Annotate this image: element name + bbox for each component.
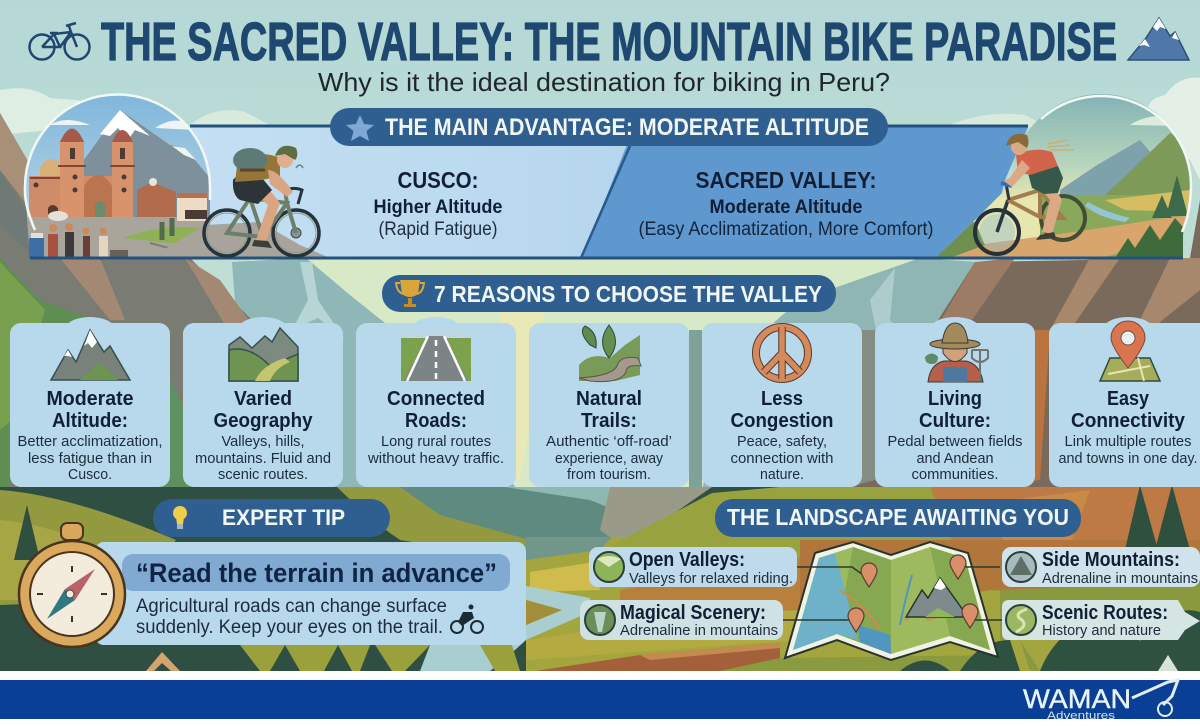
Cusco text: Higher Altitude: [374, 197, 502, 218]
card: Living Culture: Living: [928, 388, 982, 410]
icon: trophy: [396, 280, 424, 307]
icon: light bulb: [173, 506, 187, 529]
card: Moderate Altitude: Cusco.: [68, 466, 112, 483]
card: Less Congestion: Peace, safety,: [737, 433, 827, 450]
heading: main advantage: [330, 108, 888, 146]
card: Moderate Altitude: [10, 317, 170, 487]
icon: mountains: [51, 330, 130, 380]
icon: small cyclist: [451, 604, 483, 633]
card: Easy Connectivity: Link multiple routes: [1064, 433, 1192, 450]
subtitle: Why is it the ideal destination for biking in Peru?: [318, 67, 890, 97]
card: Moderate Altitude: Moderate: [46, 388, 134, 410]
label: Scenic Routes: [1002, 600, 1200, 640]
icon: mountains: [1128, 18, 1189, 60]
icon: riding cyclist: [975, 134, 1085, 254]
Sacred Valley text: Moderate Altitude: [710, 197, 862, 218]
card: Moderate Altitude: Better acclimatization,: [18, 433, 162, 450]
circle frame right: [1041, 96, 1191, 232]
card: Living Culture: Culture:: [919, 410, 991, 432]
card: Natural Trails: Authentic ‘off-road’: [546, 433, 672, 450]
heading: expert tip: [153, 499, 390, 537]
label: Side Mountains: Adrenaline in mountains: [1042, 570, 1198, 587]
card: Varied Geography: Geography: [214, 410, 313, 432]
Sacred Valley illustration: [930, 90, 1195, 260]
card: Living Culture: Pedal between fields: [888, 433, 1022, 450]
card: Moderate Altitude: less fatigue than in: [28, 450, 152, 467]
tip text: suddenly. Keep your eyes on the trail.: [136, 617, 443, 638]
icon: people on plaza: [29, 211, 128, 258]
card: Living Culture: and Andean: [916, 450, 994, 467]
card: Moderate Altitude: Altitude:: [52, 410, 128, 432]
heading: the landscape: THE LANDSCAPE AWAITING YOU: [727, 504, 1069, 530]
card: Natural Trails: Natural: [576, 388, 642, 410]
tip text: Agricultural roads can change surface: [136, 596, 447, 617]
card: Connected Roads: Long rural routes: [381, 433, 491, 450]
heading: main advantage: THE MAIN ADVANTAGE: MODERATE ALTITUDE: [385, 114, 869, 141]
label: Magical Scenery: Adrenaline in mountains: [620, 622, 778, 639]
card: Natural Trails: from tourism.: [567, 466, 651, 483]
icon: fatigued cyclist: [204, 146, 319, 256]
card: Less Congestion: [702, 323, 862, 487]
card: Varied Geography: mountains. Fluid and: [195, 450, 331, 467]
map mountain: [906, 578, 968, 617]
card: Varied Geography: [183, 317, 343, 487]
panel: main advantage: [20, 90, 1195, 260]
Cusco text: [374, 167, 502, 240]
card: Easy Connectivity: Easy: [1107, 388, 1150, 410]
Sacred Valley text: SACRED VALLEY:: [696, 167, 876, 193]
card: Natural Trails: Trails:: [581, 410, 637, 432]
panel: Sacred Valley side: [582, 127, 1028, 258]
Cusco illustration: [26, 96, 210, 256]
card: Varied Geography: Valleys, hills,: [222, 433, 304, 450]
footer band: [0, 680, 1200, 719]
Sacred Valley text: [638, 167, 934, 240]
leader lines: [783, 567, 1002, 620]
circle frame left: [25, 95, 210, 230]
Cusco text: (Rapid Fatigue): [378, 219, 498, 240]
slanted divider: [581, 146, 630, 258]
label: Open Valleys: Valleys for relaxed riding.: [629, 570, 793, 587]
label: Side Mountains: [1002, 547, 1200, 587]
heading: 7 reasons: [382, 275, 836, 312]
label: Side Mountains: Side Mountains:: [1042, 549, 1180, 571]
label: Magical Scenery: [580, 600, 783, 640]
label: Scenic Routes: History and nature: [1042, 622, 1161, 639]
label: Open Valleys: [589, 547, 797, 587]
card: Connected Roads: [356, 317, 516, 487]
label: Open Valleys: Open Valleys:: [629, 549, 745, 571]
card: Natural Trails: [529, 323, 689, 487]
card: Less Congestion: Less: [761, 388, 803, 410]
tip text: [136, 596, 447, 638]
Sacred Valley text: (Easy Acclimatization, More Comfort): [638, 219, 934, 240]
logo: Waman Adventures: WAMAN: [1023, 684, 1131, 714]
card: Easy Connectivity: and towns in one day.: [1058, 450, 1198, 467]
icon: compass: [19, 523, 125, 647]
label: Magical Scenery: Magical Scenery:: [620, 602, 766, 624]
icon: road: [401, 330, 471, 381]
card: Connected Roads: without heavy traffic.: [367, 450, 504, 467]
quote banner: “Read the terrain in advance”: [136, 558, 497, 588]
icon: valley: [229, 328, 298, 381]
logo: Waman Adventures: [1023, 680, 1178, 722]
card: Natural Trails: experience, away: [555, 450, 663, 467]
hill under left cyclist: [150, 222, 330, 258]
card: Living Culture: [875, 317, 1035, 487]
card: Less Congestion: Congestion: [730, 410, 834, 432]
card: Living Culture: communities.: [912, 466, 998, 483]
map illustration: [783, 542, 1002, 660]
card: Connected Roads: Roads:: [405, 410, 467, 432]
card: Connected Roads: Connected: [387, 388, 485, 410]
icon: farmer: [925, 323, 988, 382]
panel: expert tip: [95, 542, 526, 645]
heading: the landscape: [715, 499, 1081, 537]
icon: star: [346, 115, 374, 141]
card: Easy Connectivity: Connectivity: [1071, 410, 1186, 432]
label: Scenic Routes: Scenic Routes:: [1042, 602, 1168, 624]
panel: Cusco side: [190, 126, 640, 258]
icon: peace sign: [756, 327, 808, 379]
pins: [848, 555, 978, 632]
top and bottom rules: [30, 126, 1183, 258]
icon: map pin: [1100, 321, 1160, 381]
icon: trail and leaves: [579, 325, 641, 382]
Cusco text: CUSCO:: [398, 167, 478, 193]
card: Varied Geography: Varied: [234, 388, 292, 410]
heading: expert tip: EXPERT TIP: [222, 505, 345, 530]
card: Varied Geography: scenic routes.: [218, 466, 308, 483]
card: Less Congestion: connection with: [730, 450, 834, 467]
logo: Waman Adventures: Adventures: [1047, 710, 1116, 722]
card: Easy Connectivity: [1049, 317, 1200, 487]
card: Less Congestion: nature.: [760, 466, 804, 483]
heading: 7 reasons: 7 REASONS TO CHOOSE THE VALLEY: [434, 281, 822, 307]
lower landscape: [0, 487, 780, 671]
icon: bicycle: [30, 23, 90, 60]
